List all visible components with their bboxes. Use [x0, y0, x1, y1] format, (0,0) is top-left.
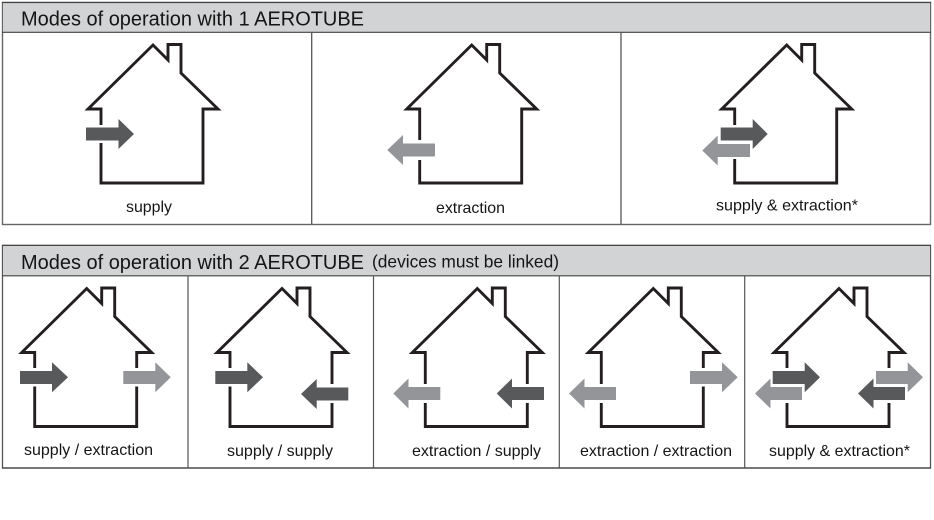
panel frame 2	[2, 245, 931, 468]
label: extraction: extraction	[436, 200, 505, 217]
icon: house	[22, 288, 152, 426]
icon: house	[588, 288, 718, 426]
heading: modes with 2 AEROTUBE: Modes of operation with 2 AEROTUBE	[21, 252, 364, 274]
arrow: extraction left, gray	[755, 378, 802, 408]
arrow: extraction right, gray	[690, 362, 738, 392]
cell: supply / extraction	[20, 288, 171, 459]
arrow: supply left, dark	[215, 362, 263, 392]
arrow: supply, dark	[497, 378, 544, 408]
note: devices must be linked: (devices must be linked)	[372, 251, 559, 271]
heading: modes with 1 AEROTUBE: Modes of operation with 1 AEROTUBE	[21, 8, 364, 30]
label: supply / extraction	[24, 442, 153, 459]
label: extraction / supply	[412, 443, 541, 460]
icon: house, extraction	[407, 44, 537, 183]
cell: extraction / extraction	[569, 288, 738, 460]
arrow: supply, dark	[721, 119, 768, 149]
cell: extraction / supply	[393, 288, 544, 460]
panel: modes with 1 AEROTUBE	[2, 2, 931, 224]
icon: house	[412, 288, 542, 426]
arrow: supply left, dark	[773, 362, 820, 392]
arrow: supply, dark	[20, 362, 68, 392]
arrow: extraction left, gray	[569, 378, 616, 408]
arrow: extraction, gray	[123, 362, 171, 392]
cell: supply and extraction	[702, 44, 858, 214]
label: supply and extraction: supply & extraction*	[716, 198, 858, 214]
arrow: supply right, dark	[858, 378, 905, 408]
arrow: extraction right, gray	[876, 362, 923, 392]
arrow: extraction, gray	[393, 378, 440, 408]
cell: supply and extraction	[755, 288, 923, 460]
cell: supply / supply	[215, 288, 348, 460]
arrow: supply, dark	[86, 119, 134, 149]
icon: house, supply and extraction	[722, 44, 852, 183]
cell: supply	[86, 44, 218, 216]
panel frame 1	[2, 2, 931, 224]
icon: house, supply	[88, 44, 218, 183]
icon: house	[217, 288, 347, 426]
label: extraction / extraction	[580, 443, 732, 460]
label: supply & extraction*	[769, 443, 910, 460]
arrow: supply right, dark	[301, 379, 348, 409]
icon: house	[774, 288, 904, 426]
panel: modes with 2 AEROTUBE	[2, 245, 931, 468]
cell: extraction	[387, 44, 537, 217]
arrow: extraction, gray	[702, 136, 750, 166]
arrow: extraction, gray	[387, 135, 435, 165]
label: supply: supply	[126, 199, 172, 216]
label: supply / supply	[227, 443, 333, 460]
